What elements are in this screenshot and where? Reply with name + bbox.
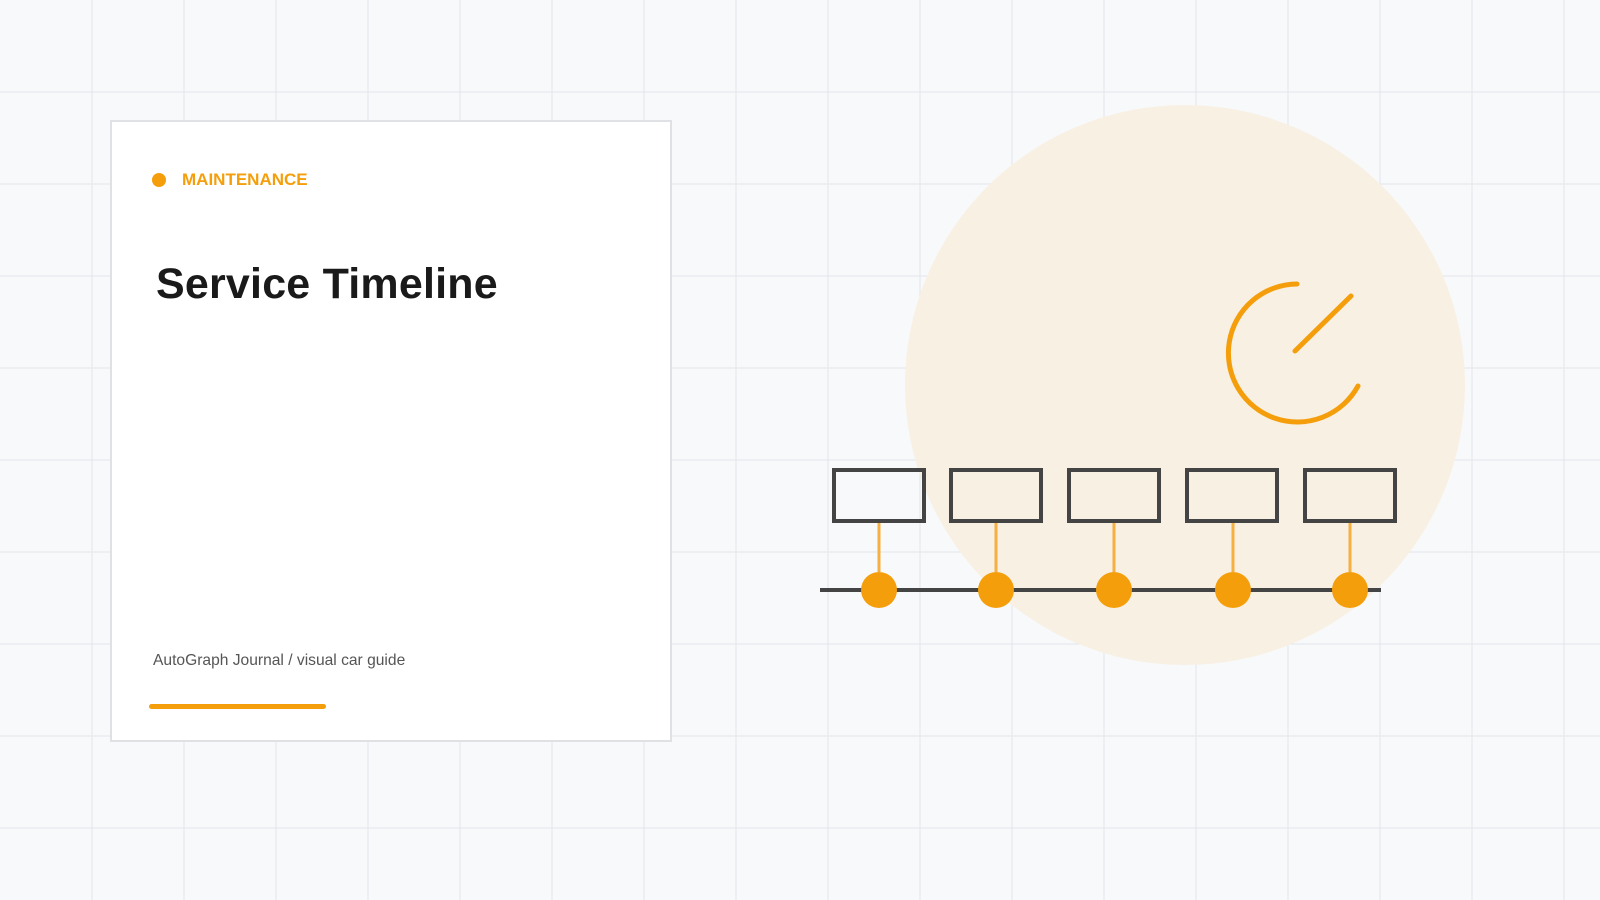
footer text: AutoGraph Journal / visual car guide	[153, 652, 405, 669]
heading: Service Timeline	[156, 260, 498, 308]
tag: maintenance	[152, 170, 308, 189]
panel: title card	[110, 120, 672, 742]
background circle	[905, 105, 1465, 665]
timeline chart	[820, 470, 1395, 608]
panel: title card: MAINTENANCE	[182, 170, 308, 189]
accent bar	[149, 704, 326, 709]
icon: clock	[1228, 284, 1358, 422]
